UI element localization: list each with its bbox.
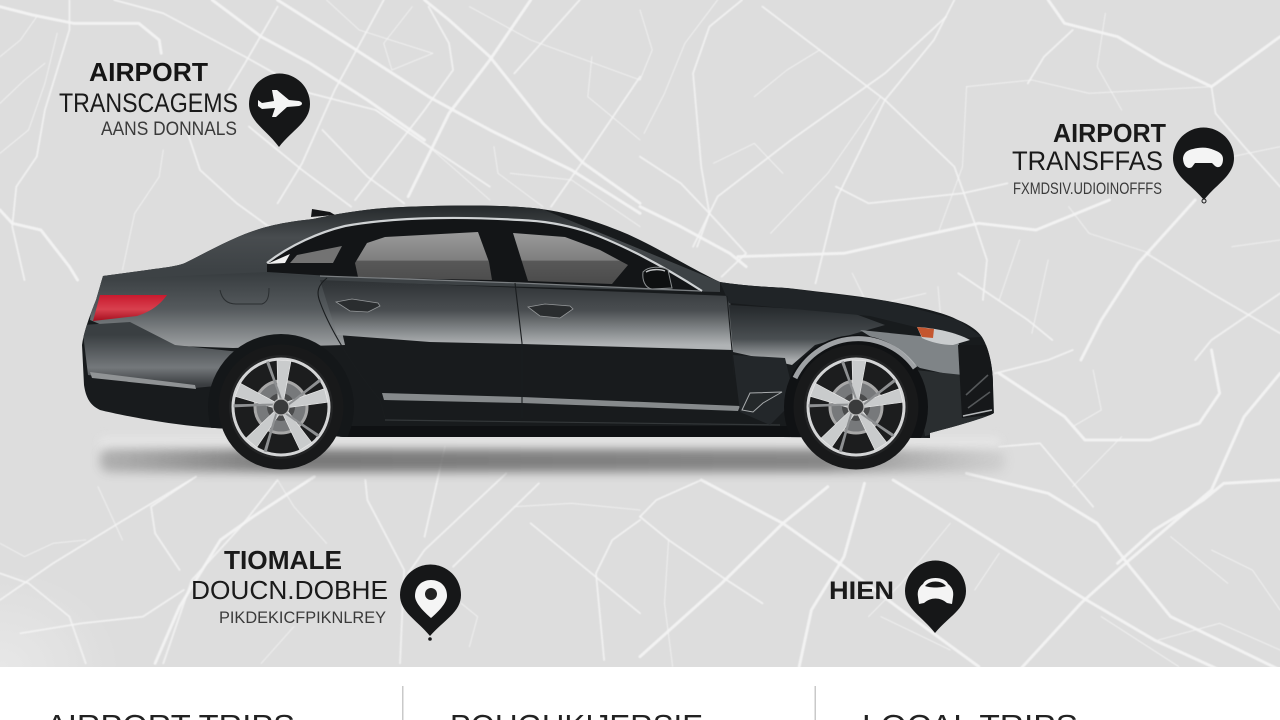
rear wheel (218, 344, 344, 470)
caption: FXMDSIV.UDIOINOFFFS (1013, 179, 1162, 198)
front side vent (742, 392, 782, 412)
door handle front (528, 304, 573, 318)
front wheel (794, 344, 918, 470)
icon: location pin (400, 564, 461, 641)
rear door window (355, 232, 492, 280)
icon: car front pin (905, 560, 966, 633)
car body (82, 206, 994, 438)
heading: HIEN (829, 577, 894, 605)
rear quarter panel (90, 272, 345, 348)
caption: AANS DONNALS (101, 119, 237, 140)
heading line 1: TIOMALE (224, 545, 342, 575)
heading line 2: TRANSCAGEMS (59, 88, 238, 118)
wheel arches (211, 334, 343, 437)
hood (720, 282, 982, 338)
icon: airplane pin (249, 73, 310, 147)
fuel door (220, 288, 269, 304)
bottom panel (0, 667, 1280, 720)
nose (860, 330, 960, 375)
headlight (917, 327, 970, 345)
car ground shadow (100, 438, 1005, 472)
roof and rear deck (96, 200, 720, 292)
rear bumper (82, 322, 240, 388)
door seams (318, 278, 734, 418)
callout: top right (1012, 118, 1234, 203)
window chrome (267, 218, 702, 291)
icon: car pin (1173, 127, 1234, 203)
antenna fin (311, 209, 335, 217)
callout: bottom right (829, 560, 966, 633)
heading line 2: TRANSFFAS (1012, 146, 1163, 176)
caption: PIKDEKICFPIKNLREY (219, 608, 386, 627)
heading line 1: AIRPORT (89, 57, 208, 87)
front fender (729, 305, 885, 365)
tail light (93, 295, 167, 321)
heading line 2: DOUCN.DOBHE (191, 575, 388, 605)
heading line 1: AIRPORT (1053, 118, 1166, 148)
door panels (320, 280, 733, 350)
greenhouse (267, 218, 702, 291)
side mirror (643, 267, 672, 289)
front door window (513, 233, 628, 284)
car (70, 200, 1010, 480)
callout: bottom left (191, 545, 461, 641)
door handle rear (336, 299, 380, 312)
rear quarter window (290, 246, 342, 263)
callout: top left (59, 57, 310, 147)
